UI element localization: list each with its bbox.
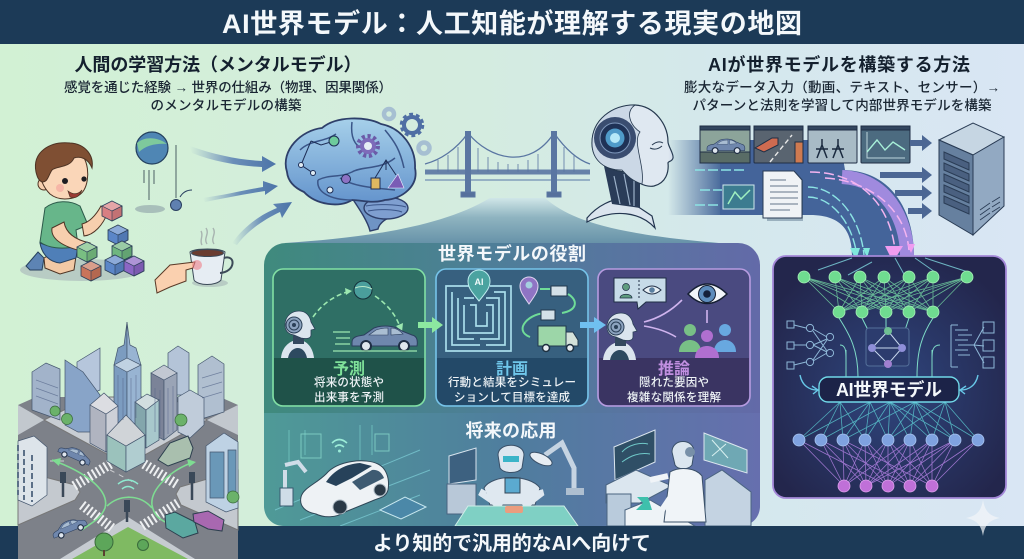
- icon: robot arm: [285, 462, 306, 490]
- illustration: robot scientist in laboratory: [606, 430, 751, 526]
- cars on street: [50, 436, 224, 541]
- green route paths: [52, 460, 194, 530]
- frame: car: [700, 126, 750, 163]
- header bar: [0, 0, 1024, 44]
- surgical table: [455, 506, 578, 526]
- footer bar: [0, 526, 1024, 559]
- icon: right code and documents: [951, 322, 994, 368]
- icon: outer gears: [384, 109, 430, 154]
- icon: robot: [603, 313, 637, 360]
- text: prediction description: 出来事を予測: [314, 390, 384, 404]
- text: AI building description: 膨大なデータ入力（動画、テキスト、センサー）→: [684, 79, 1000, 95]
- text: AI building description: パターンと法則を学習して内部世界モデルを構築: [692, 97, 992, 113]
- frame: road: [754, 126, 803, 163]
- front shop: [107, 415, 145, 472]
- icon: brain gear: [358, 136, 378, 156]
- back buildings: [18, 322, 238, 512]
- text: planning description: 行動と結果をシミュレー: [448, 375, 576, 389]
- trees: [50, 406, 239, 503]
- window lines: [36, 372, 222, 436]
- heading: roles: 世界モデルの役割: [438, 243, 586, 264]
- text: AI building description: [684, 79, 1000, 113]
- shirt: [40, 202, 88, 248]
- data stream band: [668, 140, 915, 262]
- teal streaks: [695, 170, 864, 256]
- icon: AI pin: [468, 270, 490, 301]
- text: inference description: 隠れた要因や: [639, 376, 709, 389]
- arms: [82, 206, 108, 236]
- dark tower: [151, 365, 177, 440]
- tallest tower: [114, 322, 141, 428]
- park: [72, 527, 188, 559]
- pink streaks: [810, 172, 909, 250]
- trunk lines: [839, 318, 940, 377]
- heading: future applications: 将来の応用: [466, 421, 556, 441]
- bottom network connections: [799, 440, 978, 486]
- icon: eye: [688, 284, 727, 304]
- surgical lamp arm: [545, 443, 574, 488]
- central swoosh under bridge: [285, 198, 745, 262]
- robot torso: [484, 478, 540, 505]
- left front building: [18, 436, 47, 506]
- frame: pedestrians: [808, 126, 857, 163]
- traffic lights: [63, 473, 192, 522]
- wifi symbol: [118, 480, 138, 489]
- icon: inference arrows: [644, 300, 707, 337]
- arrow: prediction to planning: [418, 317, 443, 333]
- icon: car: [333, 326, 417, 351]
- head: [38, 178, 50, 190]
- heading: human learning: 人間の学習方法（メンタルモデル）: [74, 54, 362, 75]
- icon: tablet: [380, 497, 426, 519]
- monitor left: [614, 430, 655, 480]
- watermark sparkle: [966, 500, 1000, 536]
- robot head: [498, 445, 524, 472]
- icon: speech bubble: [614, 278, 666, 309]
- stream connectors into network: [818, 258, 968, 276]
- arrows to server: [880, 135, 932, 219]
- card: inference: [598, 269, 750, 406]
- lab coat: [664, 469, 706, 522]
- illustration: falling ball: [135, 132, 192, 213]
- crosswalks: [74, 463, 178, 528]
- nodes: second row: [833, 306, 939, 318]
- label: planning: 計画: [496, 360, 528, 378]
- icon: people: [679, 324, 736, 358]
- text: prediction description: 将来の状態や: [314, 375, 384, 389]
- text: inference description: [627, 376, 722, 404]
- icon: left mini network: [787, 321, 834, 369]
- sidewalks: [44, 397, 207, 465]
- label: AI world model: [819, 377, 959, 402]
- mid-left building: [90, 393, 118, 452]
- icon: server rack: [939, 123, 1004, 235]
- icon: route with truck: [520, 277, 578, 352]
- text: human learning description: 感覚を通じた経験 → 世界の仕組み（物理、因果関係）: [64, 79, 392, 95]
- text: human learning description: のメンタルモデルの構築: [150, 97, 302, 113]
- lower network connections to label: [799, 402, 978, 440]
- brain with gears: [286, 109, 430, 231]
- arrows: experience into brain: [190, 146, 292, 245]
- illustration: isometric smart city: [18, 322, 239, 559]
- text: prediction description: [314, 375, 384, 404]
- text: human learning description: [64, 79, 392, 113]
- car body: [301, 461, 389, 517]
- illustration: hand touching hot cup: [155, 228, 233, 293]
- icon: maze: [446, 286, 511, 351]
- label: AI world model: AI世界モデル: [836, 379, 942, 400]
- heading: AI building: AIが世界モデルを構築する方法: [708, 54, 970, 75]
- upper network connections: [804, 277, 967, 312]
- text: planning description: ションして目標を達成: [454, 390, 570, 404]
- panel: future applications background: [264, 413, 760, 526]
- desks: [606, 470, 672, 503]
- card: planning: [436, 269, 588, 406]
- video frames: [700, 126, 910, 163]
- card: prediction: [273, 269, 425, 406]
- illustration: self-driving car: [275, 425, 430, 526]
- nodes: bottom row: [838, 480, 938, 492]
- panel: world model roles and future applications: [264, 243, 760, 526]
- purple outer stripe of band: [842, 177, 907, 256]
- right front building: [206, 433, 238, 512]
- bridge: [425, 131, 590, 197]
- frame: line chart: [861, 126, 910, 163]
- icon: ball trajectory: [313, 281, 403, 332]
- icon: central graph: [866, 327, 909, 368]
- shoe and legs: [26, 252, 44, 270]
- arrow: planning to inference: [580, 317, 606, 333]
- text: inference description: 複雑な関係を理解: [627, 390, 722, 404]
- scientist head: [672, 442, 694, 469]
- blocks: [77, 201, 144, 281]
- monitor right: [704, 433, 747, 473]
- nodes: top row: [798, 271, 973, 283]
- icon: robot: [281, 311, 315, 358]
- footer text: より知的で汎用的なAIへ向けて: [373, 532, 651, 555]
- label: prediction: 予測: [333, 360, 365, 378]
- arrowheads: [885, 244, 915, 262]
- text: planning description: [448, 375, 576, 404]
- arrows toward label: [800, 375, 978, 394]
- teal building: [135, 394, 159, 448]
- illustration: child playing with blocks: [20, 143, 144, 281]
- document icon: [763, 171, 803, 221]
- title: AI世界モデル：人工知能が理解する現実の地図: [222, 8, 802, 39]
- nodes: middle row: [793, 434, 984, 446]
- chart frame: [723, 185, 754, 209]
- robot head in profile: [587, 105, 673, 228]
- icon: AI pin: AI: [474, 277, 484, 287]
- illustration: surgical robot: [447, 443, 584, 526]
- label: inference: 推論: [658, 360, 690, 378]
- panel: AI world model neural network: [773, 256, 1006, 498]
